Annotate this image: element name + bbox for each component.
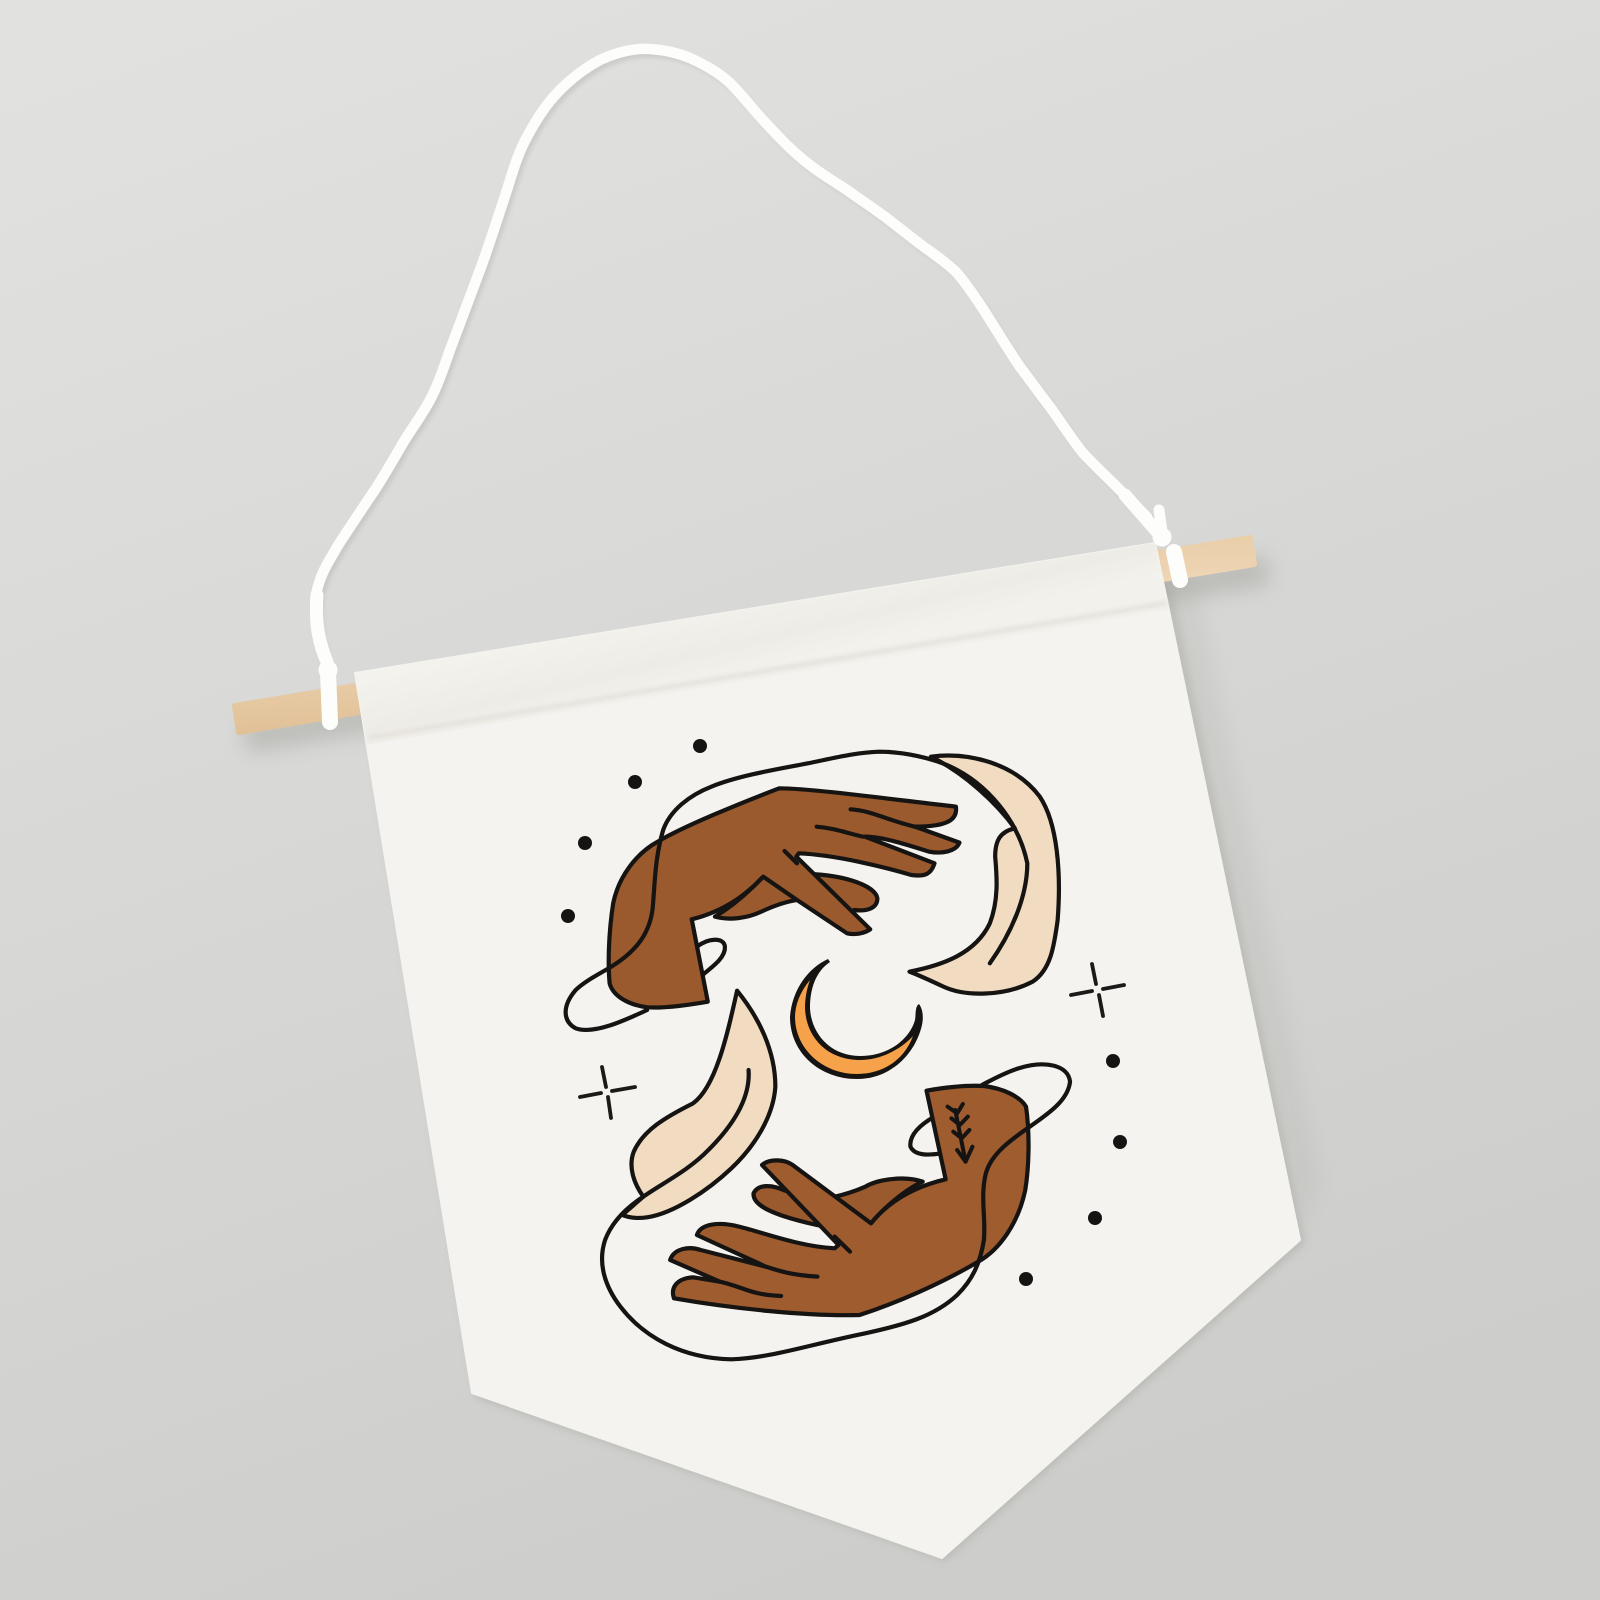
lower hand group [602, 991, 1070, 1359]
left rope knot [316, 595, 333, 722]
upper hand group [566, 752, 1059, 1030]
lower hand [670, 1086, 1029, 1315]
small loop behind lower hand [910, 1117, 942, 1155]
icon: leaf arrow mark [948, 1104, 972, 1162]
small loop behind hand [697, 940, 725, 975]
right rope knot [1125, 495, 1180, 580]
banner shadow [360, 552, 1305, 1561]
icon: crescent moon [790, 959, 923, 1079]
lower cream crescent [622, 991, 775, 1218]
lower blob outline [602, 1064, 1070, 1359]
rope shadow [319, 54, 1151, 665]
hanging rope [315, 49, 1147, 660]
icon: stars and dots [561, 739, 1127, 1286]
wooden rod [235, 538, 1254, 732]
rod shadow [245, 570, 1268, 738]
fabric banner [355, 543, 1300, 1558]
upper cream crescent [909, 756, 1059, 994]
lower behind finger [754, 1179, 923, 1226]
lower finger lines [720, 1237, 850, 1296]
upper blob outline [566, 752, 1027, 1030]
upper hand [609, 788, 959, 1008]
hand finger lines [785, 809, 915, 863]
behind finger [715, 874, 877, 920]
